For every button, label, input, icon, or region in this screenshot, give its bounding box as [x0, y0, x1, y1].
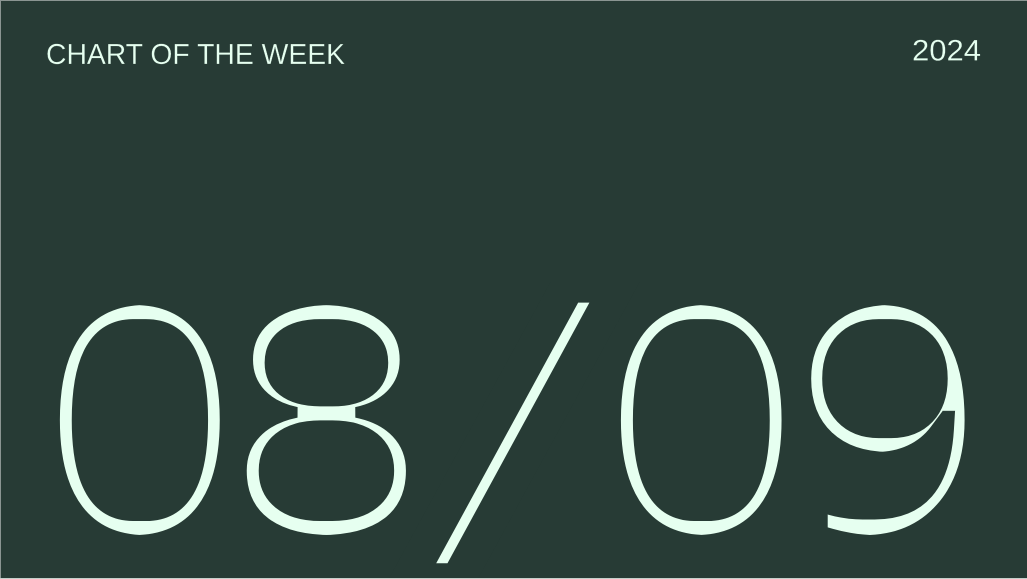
large date: 08 / 09 — [24, 224, 1001, 579]
month digits and day digits — [24, 241, 1001, 579]
year: 2024 — [912, 34, 981, 68]
title: CHART OF THE WEEK — [46, 39, 346, 71]
